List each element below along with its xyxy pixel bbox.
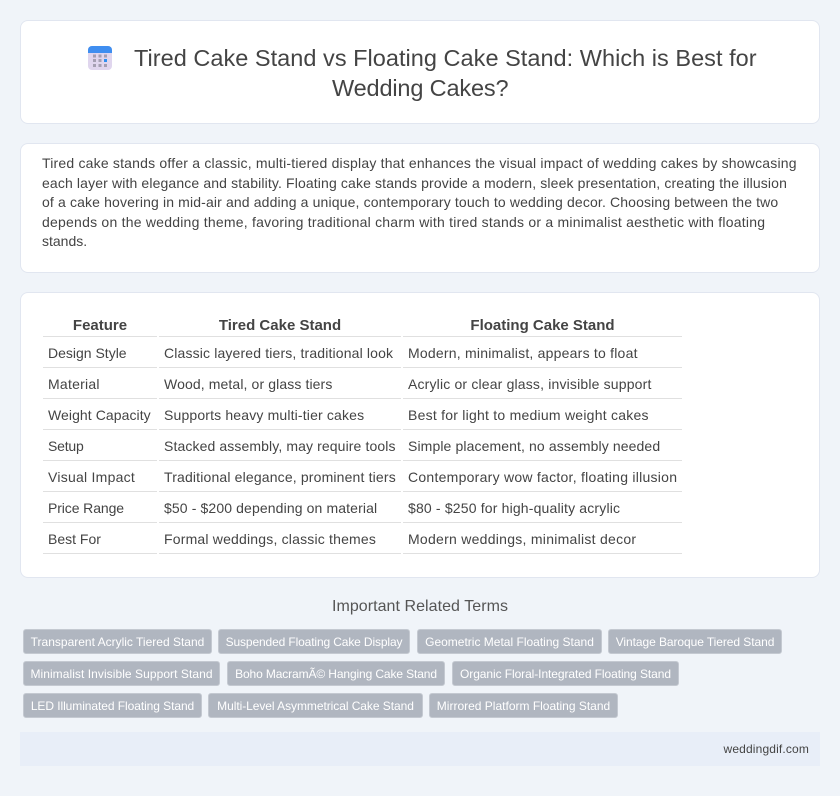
- related term tags: Minimalist Invisible Support Stand: [30, 667, 213, 681]
- comparison table: Modern weddings, minimalist decor: [408, 531, 636, 547]
- related term tags: Transparent Acrylic Tiered Stand: [31, 635, 204, 649]
- related term tags: Multi-Level Asymmetrical Cake Stand: [217, 699, 414, 713]
- comparison table: Modern, minimalist, appears to float: [408, 345, 638, 361]
- comparison table: [43, 317, 682, 554]
- related term tags: Vintage Baroque Tiered Stand: [616, 635, 774, 649]
- comparison table: Best for light to medium weight cakes: [408, 407, 649, 423]
- comparison table: Stacked assembly, may require tools: [164, 438, 396, 454]
- intro text: each layer with elegance and stability. Floating cake stands provide a modern, sleek presentation, creating the illusion: [42, 175, 787, 191]
- intro text: Tired cake stands offer a classic, multi-tiered display that enhances the visual impact of wedding cakes by showcasing: [42, 155, 797, 171]
- comparison table: Classic layered tiers, traditional look: [164, 345, 393, 361]
- related term tags: Geometric Metal Floating Stand: [425, 635, 594, 649]
- intro text: stands.: [42, 233, 87, 249]
- comparison table: Traditional elegance, prominent tiers: [164, 469, 396, 485]
- title: Tired Cake Stand vs Floating Cake Stand: Which is Best for: [134, 45, 757, 71]
- related terms heading: Important Related Terms: [332, 598, 508, 615]
- comparison table: Formal weddings, classic themes: [164, 531, 376, 547]
- footer credit: weddingdif.com: [724, 742, 809, 756]
- comparison table: Best For: [48, 531, 101, 547]
- comparison table: Contemporary wow factor, floating illusion: [408, 469, 677, 485]
- footer bar: [20, 732, 820, 766]
- comparison table: Supports heavy multi-tier cakes: [164, 407, 364, 423]
- comparison table: Design Style: [48, 345, 127, 361]
- icon: calendar: [88, 46, 112, 70]
- related term tags: LED Illuminated Floating Stand: [31, 699, 194, 713]
- related term tags: Suspended Floating Cake Display: [226, 635, 402, 649]
- comparison table: Simple placement, no assembly needed: [408, 438, 660, 454]
- comparison table: $80 - $250 for high-quality acrylic: [408, 500, 620, 516]
- comparison table: $50 - $200 depending on material: [164, 500, 377, 516]
- comparison table: Setup: [48, 438, 84, 454]
- intro panel: [20, 143, 820, 273]
- title: Wedding Cakes?: [332, 75, 508, 101]
- comparison table: Weight Capacity: [48, 407, 151, 423]
- comparison table: Price Range: [48, 500, 124, 516]
- comparison table: Material: [48, 376, 100, 392]
- comparison table: Floating Cake Stand: [470, 317, 615, 334]
- title: [134, 45, 757, 101]
- table panel: [20, 292, 820, 578]
- related term tags: Organic Floral-Integrated Floating Stand: [460, 667, 671, 681]
- comparison table: Tired Cake Stand: [219, 317, 341, 334]
- intro text: of a cake hovering in mid-air and adding a unique, contemporary touch to wedding decor. Choosing between the two: [42, 194, 778, 210]
- comparison table: Feature: [73, 317, 127, 334]
- header panel: [20, 20, 820, 124]
- comparison table: Visual Impact: [48, 469, 135, 485]
- intro text: depends on the wedding theme, favoring traditional charm with tired stands or a minimalist aesthetic with floating: [42, 214, 765, 230]
- related term tags: Boho MacramÃ© Hanging Cake Stand: [235, 667, 437, 681]
- comparison table: Wood, metal, or glass tiers: [164, 376, 332, 392]
- related term tags: [23, 629, 782, 718]
- comparison table: Acrylic or clear glass, invisible support: [408, 376, 652, 392]
- intro text: [42, 155, 797, 249]
- related term tags: Mirrored Platform Floating Stand: [437, 699, 610, 713]
